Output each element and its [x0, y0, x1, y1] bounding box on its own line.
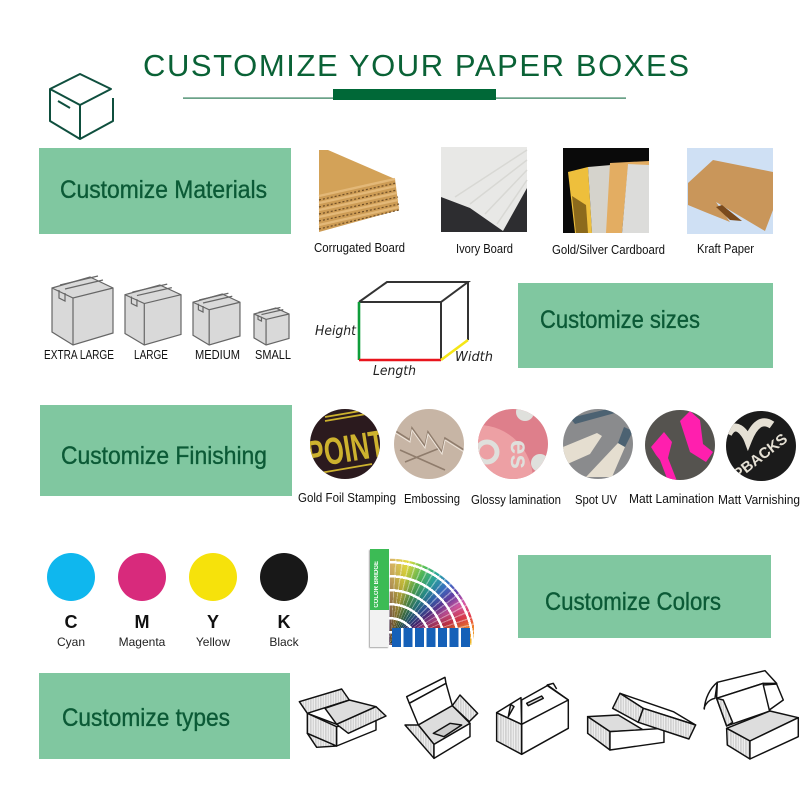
- image: colour bridge fan guide: [368, 549, 474, 648]
- labels: box sizes: [44, 348, 291, 362]
- image: matt lamination: [645, 410, 715, 481]
- swatch: black: [260, 553, 308, 649]
- icon: small box: [254, 307, 289, 345]
- image: embossing: [394, 409, 464, 479]
- labels: finishing types: Matt Varnishing: [718, 493, 800, 507]
- labels: finishing types: Embossing: [404, 492, 460, 506]
- labels: box sizes: EXTRA LARGE: [44, 348, 114, 362]
- image: glossy lamination: [478, 409, 548, 479]
- title: CUSTOMIZE YOUR PAPER BOXES: [143, 48, 689, 83]
- panel: customize colors: [518, 555, 771, 638]
- diagram: box dimensions: [315, 282, 493, 379]
- title underline: [183, 89, 626, 100]
- panel: customize colors: Customize Colors: [545, 588, 721, 616]
- icon: box: [50, 74, 113, 139]
- labels: box sizes: LARGE: [134, 348, 168, 362]
- image: matt varnishing: [726, 411, 796, 483]
- labels: finishing types: Matt Lamination: [629, 492, 714, 506]
- image: matt varnishing: PBACKS: [730, 430, 791, 483]
- swatch: magenta: [118, 553, 166, 649]
- labels: box sizes: SMALL: [255, 348, 291, 362]
- swatch: black: K: [278, 612, 290, 632]
- swatch: yellow: [189, 553, 237, 649]
- image: glossy lamination: es: [505, 440, 535, 469]
- image: ivory board: [441, 147, 527, 232]
- panel: customize materials: Customize Materials: [60, 176, 267, 204]
- label: ivory board: Ivory Board: [456, 242, 513, 256]
- icons: box types: [299, 671, 798, 759]
- panel: customize finishing: [40, 405, 292, 496]
- swatch: cyan: Cyan: [57, 635, 85, 649]
- swatch: magenta: Magenta: [119, 635, 166, 649]
- icon: gable box: [497, 683, 568, 754]
- icon: extra large box: [52, 276, 113, 345]
- swatch: black: Black: [269, 635, 300, 649]
- swatch: cyan: C: [64, 612, 78, 632]
- diagram: box dimensions: Length: [373, 364, 416, 379]
- icon: lid and base box: [588, 693, 696, 750]
- panel: customize finishing: Customize Finishing: [61, 442, 267, 470]
- icon: shipping box: [299, 689, 386, 747]
- labels: finishing types: [298, 491, 800, 507]
- swatch: yellow: Yellow: [196, 635, 230, 649]
- swatch: magenta: M: [134, 612, 150, 632]
- image: gold foil stamping: POINT: [304, 423, 388, 477]
- image: gold and silver cardboard: [563, 148, 649, 233]
- icon: large box: [125, 284, 181, 345]
- panel: customize materials: [39, 148, 291, 234]
- label: gold silver cardboard: Gold/Silver Cardboard: [552, 243, 665, 257]
- icon: open tray box: [405, 677, 478, 758]
- swatch: yellow: Y: [207, 612, 219, 632]
- label: kraft paper: Kraft Paper: [697, 242, 754, 256]
- swatch: cyan: [47, 553, 95, 649]
- labels: finishing types: Spot UV: [575, 493, 618, 507]
- colour fan cover strip: [370, 549, 389, 647]
- label: corrugated board: Corrugated Board: [314, 241, 405, 255]
- image: spot uv: [563, 408, 633, 479]
- image: kraft paper: [687, 148, 773, 234]
- labels: finishing types: Glossy lamination: [471, 493, 561, 507]
- labels: finishing types: Gold Foil Stamping: [298, 491, 396, 505]
- diagram: box dimensions: Height: [315, 324, 357, 339]
- panel: customize types: Customize types: [62, 704, 230, 732]
- colour fan blue swatches: [392, 628, 470, 647]
- icon: mailer box: [704, 671, 798, 759]
- icon: medium box: [193, 293, 240, 345]
- image: gold foil stamping: [310, 409, 380, 479]
- labels: box sizes: MEDIUM: [195, 348, 240, 362]
- panel: customize types: [39, 673, 290, 759]
- panel: customize sizes: Customize sizes: [540, 306, 700, 334]
- colour fan cover strip: COLOR BRIDGE: [374, 561, 380, 608]
- image: corrugated board: [319, 150, 399, 232]
- panel: customize sizes: [518, 283, 773, 368]
- diagram: box dimensions: Width: [455, 350, 493, 365]
